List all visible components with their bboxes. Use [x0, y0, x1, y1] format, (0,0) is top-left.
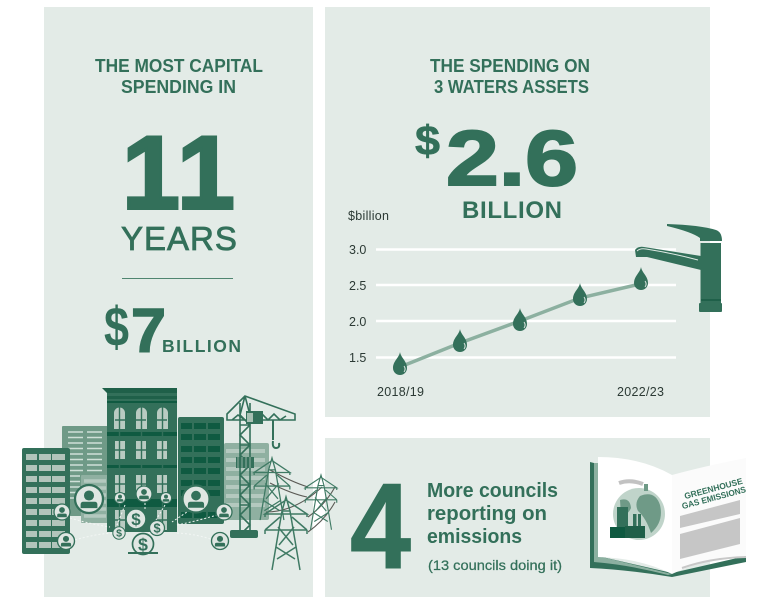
value: 2.6 billion: BILLION	[462, 197, 562, 224]
line chart: spending by year: 2.0	[349, 315, 366, 329]
value: 7 billion: 7	[131, 297, 166, 366]
illustration: city with buildings, crane, pylons and people	[22, 388, 337, 570]
icon: open report book	[590, 457, 747, 577]
heading: spending on 3 waters: 3 WATERS ASSETS	[434, 77, 589, 97]
value: 2.6 billion	[415, 114, 578, 224]
connection lines	[70, 503, 217, 540]
panel: councils reporting	[325, 438, 710, 597]
heading: most capital spending: THE MOST CAPITAL	[95, 56, 263, 76]
line chart: spending by year: 2018/19	[377, 385, 424, 399]
heading: spending on 3 waters: THE SPENDING ON	[430, 56, 590, 76]
icon: tap	[635, 224, 722, 312]
line chart: spending by year: 3.0	[349, 243, 366, 257]
panel: 3 waters spending	[325, 7, 710, 417]
globe and factory	[610, 481, 665, 540]
label: years: YEARS	[121, 220, 238, 257]
book title: GREENHOUSE	[683, 476, 744, 501]
building: dark right block	[178, 417, 224, 524]
building: central tall block	[102, 388, 177, 532]
text: more councils reporting	[427, 480, 562, 573]
heading: most capital spending: SPENDING IN	[121, 77, 236, 97]
line chart: spending by year: $billion	[348, 209, 389, 223]
value: 2.6 billion: $	[415, 117, 440, 164]
text: more councils reporting: reporting on	[427, 503, 547, 525]
building: left block	[22, 448, 70, 554]
book title: GAS EMISSIONS	[681, 484, 747, 511]
value: 7 billion	[104, 295, 241, 366]
book text lines	[680, 500, 740, 559]
people icons	[54, 485, 232, 550]
heading: spending on 3 waters	[430, 56, 590, 97]
big number: 4: 4	[350, 458, 411, 594]
text: more councils reporting: emissions	[427, 526, 522, 548]
panel: capital spending	[44, 7, 313, 597]
building: pale back right	[224, 443, 269, 520]
line chart: spending by year	[348, 209, 676, 399]
text: more councils reporting: More councils	[427, 480, 558, 502]
line chart: spending by year: 2022/23	[617, 385, 664, 399]
pylons and power lines	[254, 458, 337, 570]
coins	[113, 509, 164, 554]
heading: most capital spending	[95, 56, 263, 97]
text: more councils reporting: (13 councils doing it)	[428, 557, 562, 573]
line chart: spending by year: 1.5	[349, 351, 366, 365]
big number: 11: 11	[122, 116, 235, 232]
crane	[227, 396, 295, 538]
value: 7 billion: $	[104, 295, 129, 358]
value: 7 billion: BILLION	[162, 336, 241, 356]
value: 2.6 billion: 2.6	[446, 114, 578, 202]
building: pale back left	[62, 426, 108, 523]
line chart: spending by year: 2.5	[349, 279, 366, 293]
